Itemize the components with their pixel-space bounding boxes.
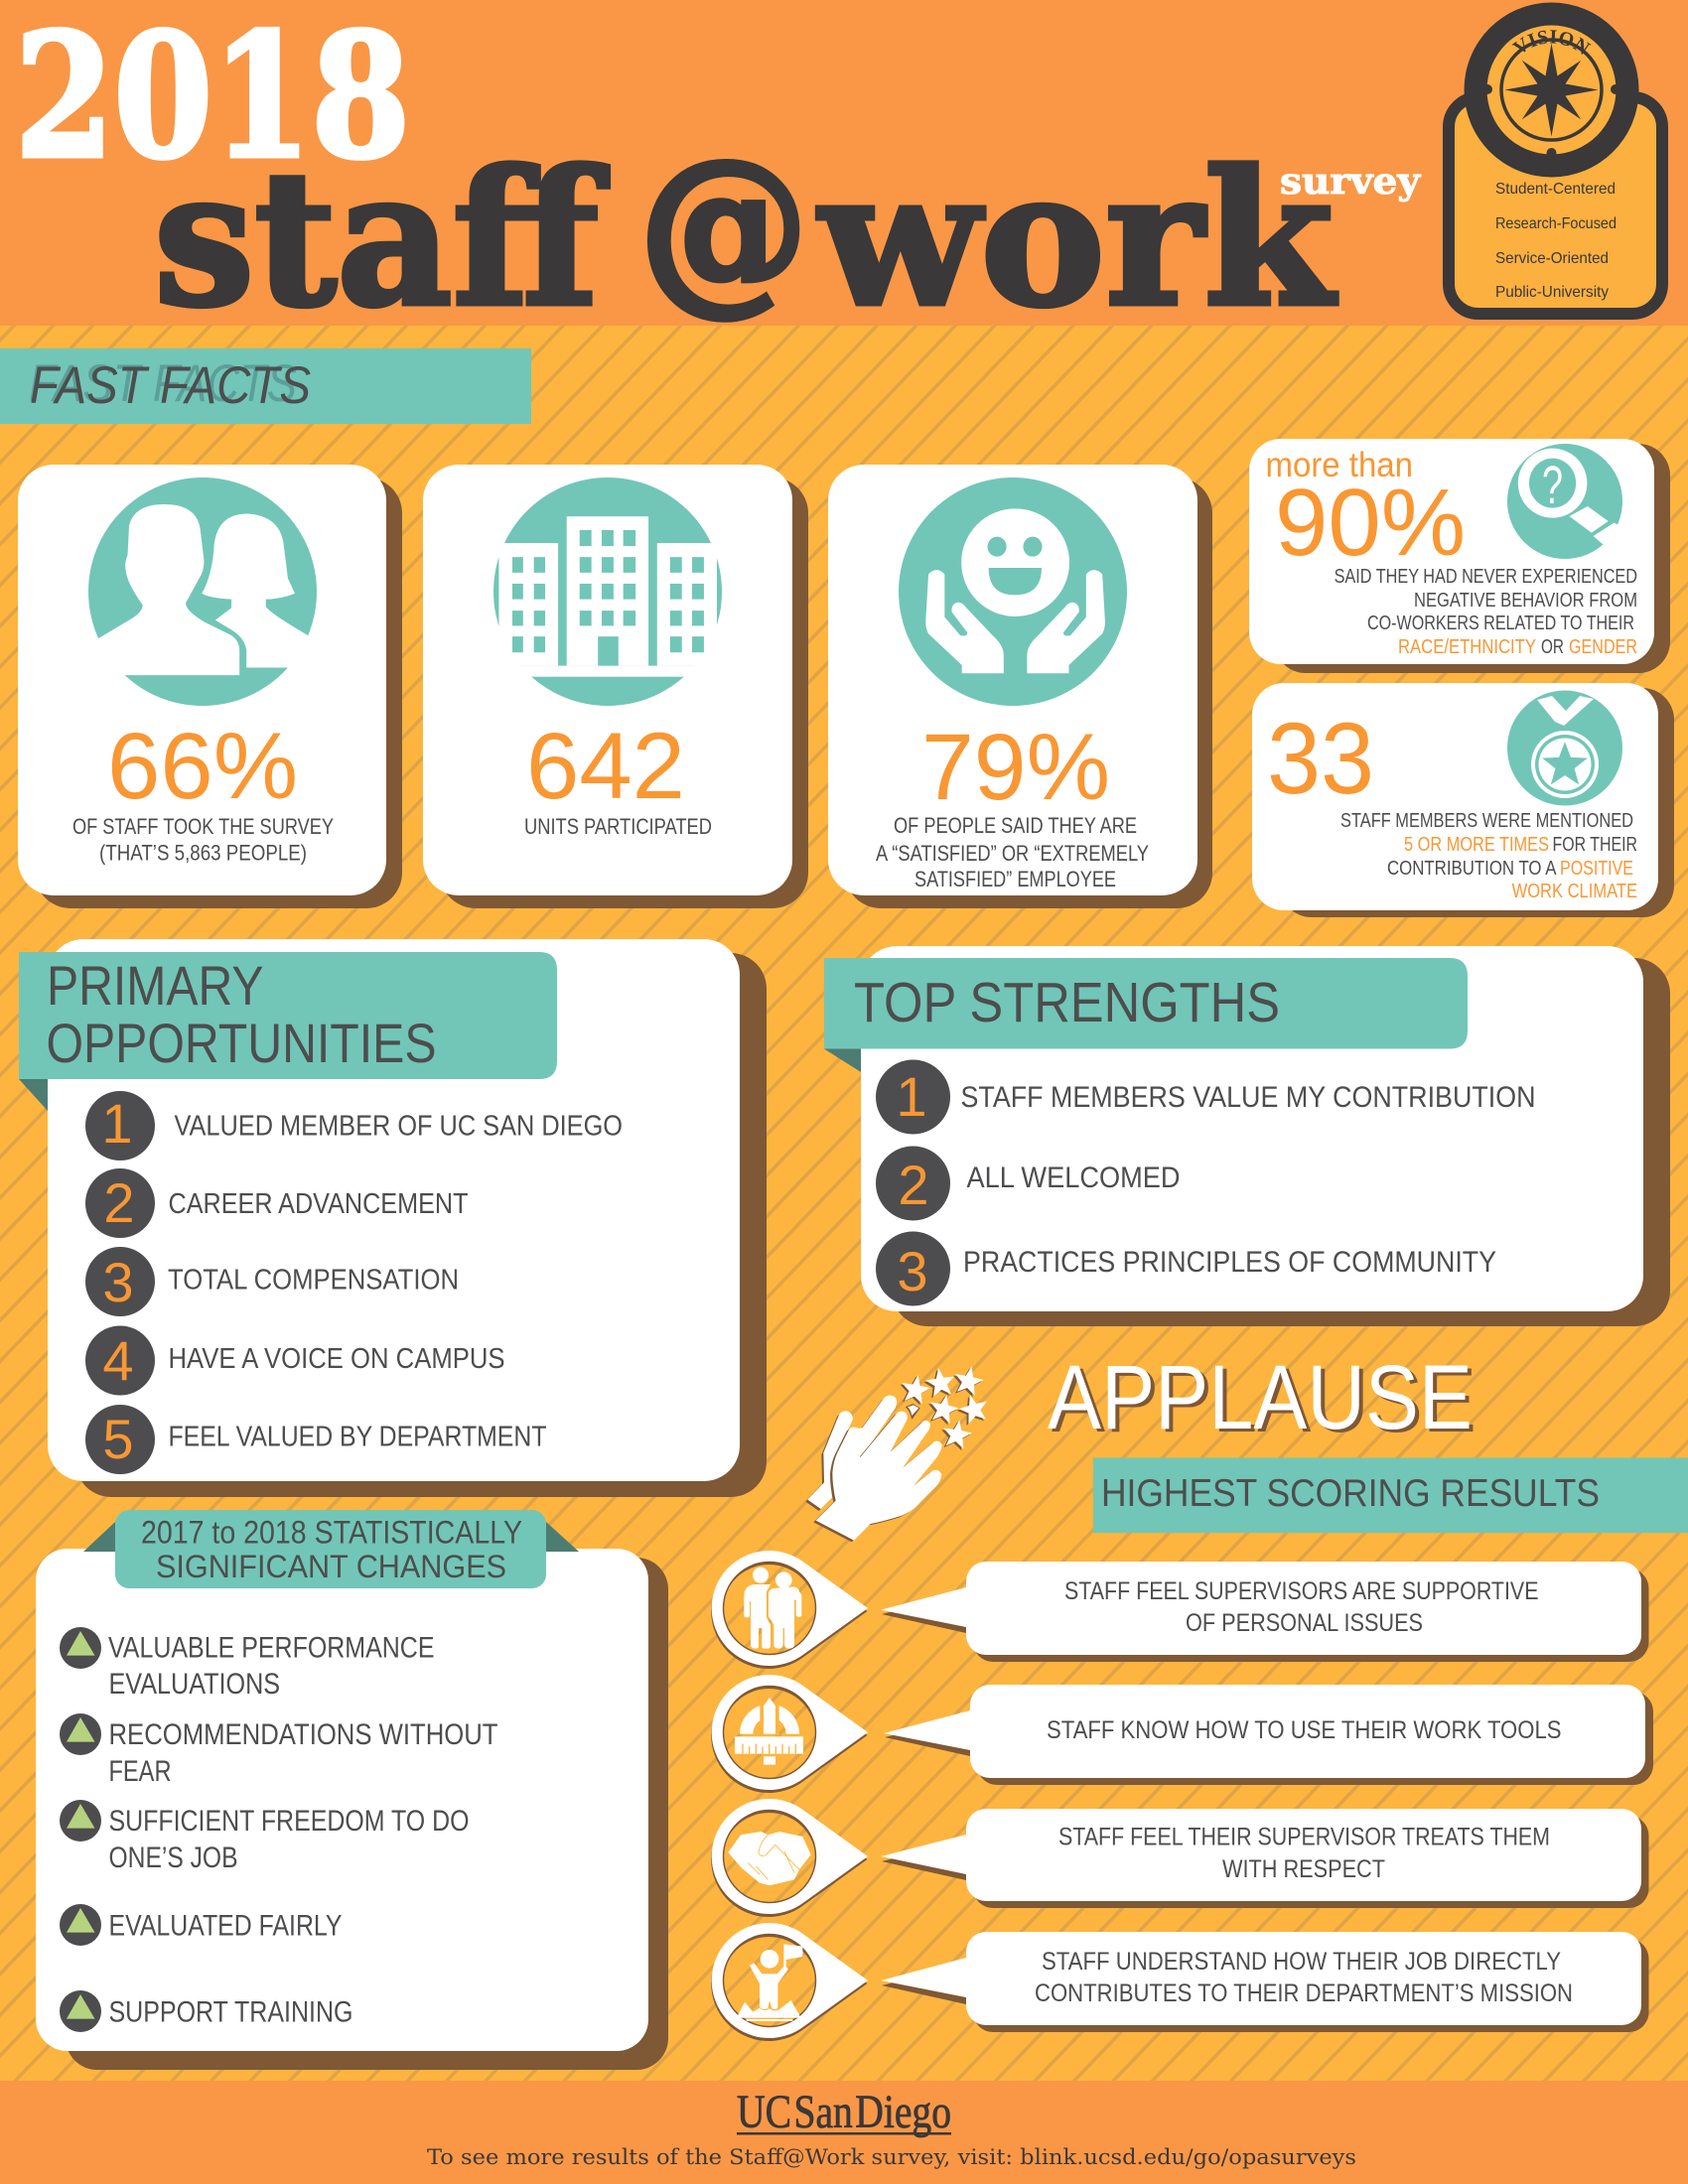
heading: fast facts	[0, 348, 531, 424]
change 3	[60, 1800, 469, 1874]
vision values list	[1495, 181, 1617, 301]
change 2: RECOMMENDATIONS WITHOUT	[109, 1718, 498, 1751]
strength 2	[876, 1146, 1180, 1221]
item 3: TOTAL COMPENSATION	[168, 1265, 459, 1297]
stat: 33: 33	[1267, 702, 1374, 815]
strength 1	[876, 1060, 1535, 1134]
label: more than: more than	[1265, 446, 1413, 484]
icon: supportive people pin	[711, 1551, 868, 1669]
panel: more than 90 percent	[1249, 439, 1670, 673]
title: staff@work	[154, 121, 1336, 348]
change 4: EVALUATED FAIRLY	[109, 1910, 342, 1943]
panel: top strengths	[824, 946, 1670, 1326]
strength 3: 3	[897, 1240, 928, 1302]
item 3	[85, 1247, 459, 1316]
description: CONTRIBUTION TO A	[1387, 858, 1557, 880]
vision badge	[1443, 2, 1668, 320]
panel: 33 staff members	[1252, 683, 1674, 917]
callout: respect: WITH RESPECT	[1222, 1855, 1385, 1883]
strength 2: 2	[898, 1154, 929, 1216]
callout: work tools: STAFF KNOW HOW TO USE THEIR WORK TOOLS	[1047, 1716, 1561, 1744]
stat: 79%: 79%	[921, 715, 1110, 820]
item 4: HAVE A VOICE ON CAMPUS	[169, 1343, 504, 1375]
icon: clapping hands with stars	[805, 1364, 991, 1542]
heading: fast facts: FAST FACTS	[30, 356, 311, 415]
callout: supervisors supportive	[881, 1562, 1648, 1662]
strength 1: STAFF MEMBERS VALUE MY CONTRIBUTION	[961, 1081, 1535, 1114]
heading: statistically significant changes: SIGNIFICANT CHANGES	[156, 1549, 506, 1584]
icon: two people	[70, 478, 334, 706]
change 1: VALUABLE PERFORMANCE	[108, 1632, 435, 1665]
heading: primary opportunities: PRIMARY	[47, 954, 264, 1017]
icon: medal	[1507, 691, 1622, 806]
description: 5 OR MORE TIMES	[1404, 834, 1549, 856]
item 5: 5	[102, 1408, 134, 1470]
callout: department mission: CONTRIBUTES TO THEIR DEPARTMENT’S MISSION	[1035, 1979, 1573, 2007]
description	[1340, 810, 1637, 902]
caption	[72, 814, 334, 866]
caption: OF STAFF TOOK THE SURVEY	[72, 814, 334, 839]
description: NEGATIVE BEHAVIOR FROM	[1414, 590, 1637, 612]
description: WORK CLIMATE	[1512, 881, 1637, 902]
strength 2: ALL WELCOMED	[967, 1161, 1180, 1194]
title: staff@work: @	[639, 121, 808, 331]
item 3: 3	[102, 1251, 134, 1313]
description: POSITIVE	[1560, 858, 1633, 880]
icon: compass star	[1505, 44, 1599, 137]
icon: tools pin	[711, 1675, 868, 1793]
title: 2018: 2018	[15, 0, 410, 197]
panel: primary opportunities	[19, 939, 767, 1497]
heading: top strengths: TOP STRENGTHS	[854, 971, 1280, 1034]
icon: smiling face in hands	[899, 478, 1127, 706]
description: RACE/ETHNICITY	[1398, 636, 1536, 658]
callout: department mission: STAFF UNDERSTAND HOW THEIR JOB DIRECTLY	[1042, 1948, 1561, 1976]
caption: SATISFIED” EMPLOYEE	[914, 867, 1116, 891]
caption: (THAT’S 5,863 PEOPLE)	[99, 840, 307, 866]
change 5: SUPPORT TRAINING	[109, 1996, 353, 2029]
item 2: 2	[103, 1171, 135, 1234]
caption: OF PEOPLE SAID THEY ARE	[894, 813, 1137, 838]
panel: 66 percent	[18, 465, 402, 908]
caption: A “SATISFIED” OR “EXTREMELY	[876, 841, 1149, 866]
stat: 66%: 66%	[107, 714, 298, 819]
panel: statistically significant changes	[36, 1510, 668, 2070]
stat: 642: 642	[526, 714, 685, 819]
description	[1335, 566, 1637, 658]
vision values list: Service-Oriented	[1495, 250, 1609, 267]
vision values list: Research-Focused	[1495, 215, 1617, 232]
heading: fast facts: FAST FACTS	[29, 354, 297, 413]
title: survey: survey	[1280, 161, 1421, 203]
icon: handshake pin	[711, 1799, 868, 1917]
logo: UC San Diego: UC San Diego	[737, 2086, 951, 2138]
item 4	[85, 1326, 504, 1396]
item 4: 4	[102, 1329, 134, 1392]
heading: statistically significant changes: 2017 to 2018 STATISTICALLY	[141, 1515, 522, 1551]
title: staff@work: staff	[154, 130, 609, 348]
item 5	[85, 1405, 547, 1474]
icon: mission figure pin	[711, 1923, 868, 2041]
item 2: CAREER ADVANCEMENT	[169, 1188, 469, 1220]
icon: magnifier with question mark: ?	[1542, 456, 1563, 515]
callout: respect: STAFF FEEL THEIR SUPERVISOR TREATS THEM	[1058, 1824, 1550, 1851]
change 3: ONE’S JOB	[109, 1842, 238, 1874]
item 5: FEEL VALUED BY DEPARTMENT	[169, 1422, 547, 1453]
strength 3: PRACTICES PRINCIPLES OF COMMUNITY	[963, 1246, 1496, 1279]
header band	[0, 0, 1688, 348]
heading: applause: APPLAUSE	[1052, 1350, 1477, 1451]
change 2	[60, 1713, 498, 1788]
icon: magnifier with question mark	[1507, 444, 1628, 559]
panel: 642 units	[423, 465, 808, 908]
heading: applause: APPLAUSE	[1048, 1347, 1473, 1448]
item 2	[85, 1168, 469, 1238]
strength 3	[876, 1231, 1496, 1306]
change 1: EVALUATIONS	[109, 1668, 280, 1701]
callout: work tools	[884, 1685, 1653, 1785]
change 2: FEAR	[109, 1755, 171, 1788]
change 5	[60, 1990, 353, 2032]
description: OR	[1541, 636, 1564, 658]
change 1	[60, 1627, 435, 1701]
heading: top strengths	[824, 958, 1468, 1072]
item 1: 1	[101, 1092, 133, 1155]
stat: 90%: 90%	[1275, 470, 1466, 576]
change 3: SUFFICIENT FREEDOM TO DO	[109, 1805, 469, 1838]
callout: supervisors supportive: STAFF FEEL SUPERVISORS ARE SUPPORTIVE	[1064, 1577, 1539, 1605]
callout: respect	[881, 1809, 1648, 1908]
strength 1: 1	[896, 1065, 927, 1128]
heading: primary opportunities	[19, 952, 557, 1111]
icon: buildings	[474, 478, 743, 706]
caption	[876, 813, 1149, 891]
heading: primary opportunities: OPPORTUNITIES	[46, 1012, 437, 1074]
footer band	[0, 2081, 1688, 2184]
heading: statistically significant changes	[83, 1510, 579, 1588]
footer note: To see more results of the Staff@Work survey, visit: blink.ucsd.edu/go/opasurveys	[427, 2145, 1356, 2169]
callout: supervisors supportive: OF PERSONAL ISSUES	[1186, 1609, 1423, 1637]
vision label: VISION	[1511, 30, 1591, 55]
heading: highest scoring results: HIGHEST SCORING RESULTS	[1101, 1472, 1600, 1515]
description: GENDER	[1569, 636, 1637, 658]
description: FOR THEIR	[1553, 834, 1637, 856]
heading: highest scoring results	[1093, 1457, 1688, 1533]
item 1	[85, 1091, 623, 1160]
change 4	[60, 1904, 342, 1946]
caption: UNITS PARTICIPATED	[524, 814, 712, 839]
title: staff@work: work	[817, 130, 1336, 348]
description: STAFF MEMBERS WERE MENTIONED	[1340, 810, 1633, 832]
callout: department mission	[881, 1932, 1648, 2032]
vision values list: Student-Centered	[1495, 181, 1616, 198]
item 1: VALUED MEMBER OF UC SAN DIEGO	[175, 1110, 623, 1142]
vision values list: Public-University	[1495, 284, 1609, 301]
panel: 79 percent	[828, 465, 1212, 908]
